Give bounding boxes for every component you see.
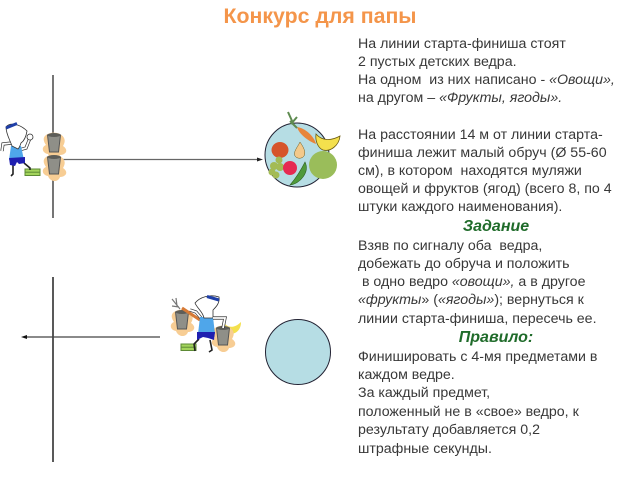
text: линии старта-финиша, пересечь ее. (358, 311, 597, 327)
hoop, top (265, 123, 329, 187)
icon: grapes (268, 156, 284, 178)
title: Конкурс для папы (223, 4, 416, 28)
text: Финишировать с 4-мя предметами в (358, 349, 597, 365)
text: 2 пустых детских ведра. (358, 54, 517, 70)
icon: buckets at start (43, 133, 66, 181)
hoop with vegetables and fruit (265, 112, 340, 187)
text: штуки каждого наименования). (358, 199, 562, 215)
icon: runner with full buckets (171, 296, 241, 352)
icon: pear (294, 142, 305, 158)
icon: cucumber (290, 162, 306, 185)
icon: carrot (288, 112, 316, 144)
text: На расстоянии 14 м от линии старта- (358, 127, 603, 143)
icon: apple (283, 161, 297, 175)
arrow back to start (21, 335, 160, 339)
text: За каждый предмет, (358, 385, 490, 401)
start-finish line, top (52, 75, 54, 218)
rules text (358, 36, 615, 457)
text: результату добавляется 0,2 (358, 422, 540, 438)
start-finish line, bottom (52, 277, 54, 462)
icon: bananas (316, 134, 340, 150)
icon: tomato (272, 142, 288, 158)
text: см), в котором находятся муляжи (358, 163, 582, 179)
text: штрафные секунды. (358, 441, 492, 457)
arrow to hoop (62, 158, 263, 162)
text: На одном из них написано - «Овощи», (358, 72, 615, 88)
text: овощей и фруктов (ягод) (всего 8, по 4 (358, 181, 612, 197)
text: добежать до обруча и положить (358, 256, 570, 272)
text: положенный не в «свое» ведро, к (358, 404, 579, 420)
hoop, empty (266, 320, 330, 384)
text: в одно ведро «овощи», а в другое (362, 274, 585, 290)
text: каждом ведре. (358, 367, 455, 383)
text: на другом – «Фрукты, ягоды». (358, 90, 562, 106)
icon: runner, top (2, 124, 40, 176)
text: финиша лежит малый обруч (Ø 55-60 (358, 145, 607, 161)
text: «фрукты» («ягоды»); вернуться к (358, 292, 584, 308)
text: Взяв по сигналу оба ведра, (358, 238, 542, 254)
icon: cabbage (309, 151, 337, 179)
text: На линии старта-финиша стоят (358, 36, 566, 52)
text: Правило: (459, 329, 533, 346)
text: Задание (463, 218, 529, 235)
